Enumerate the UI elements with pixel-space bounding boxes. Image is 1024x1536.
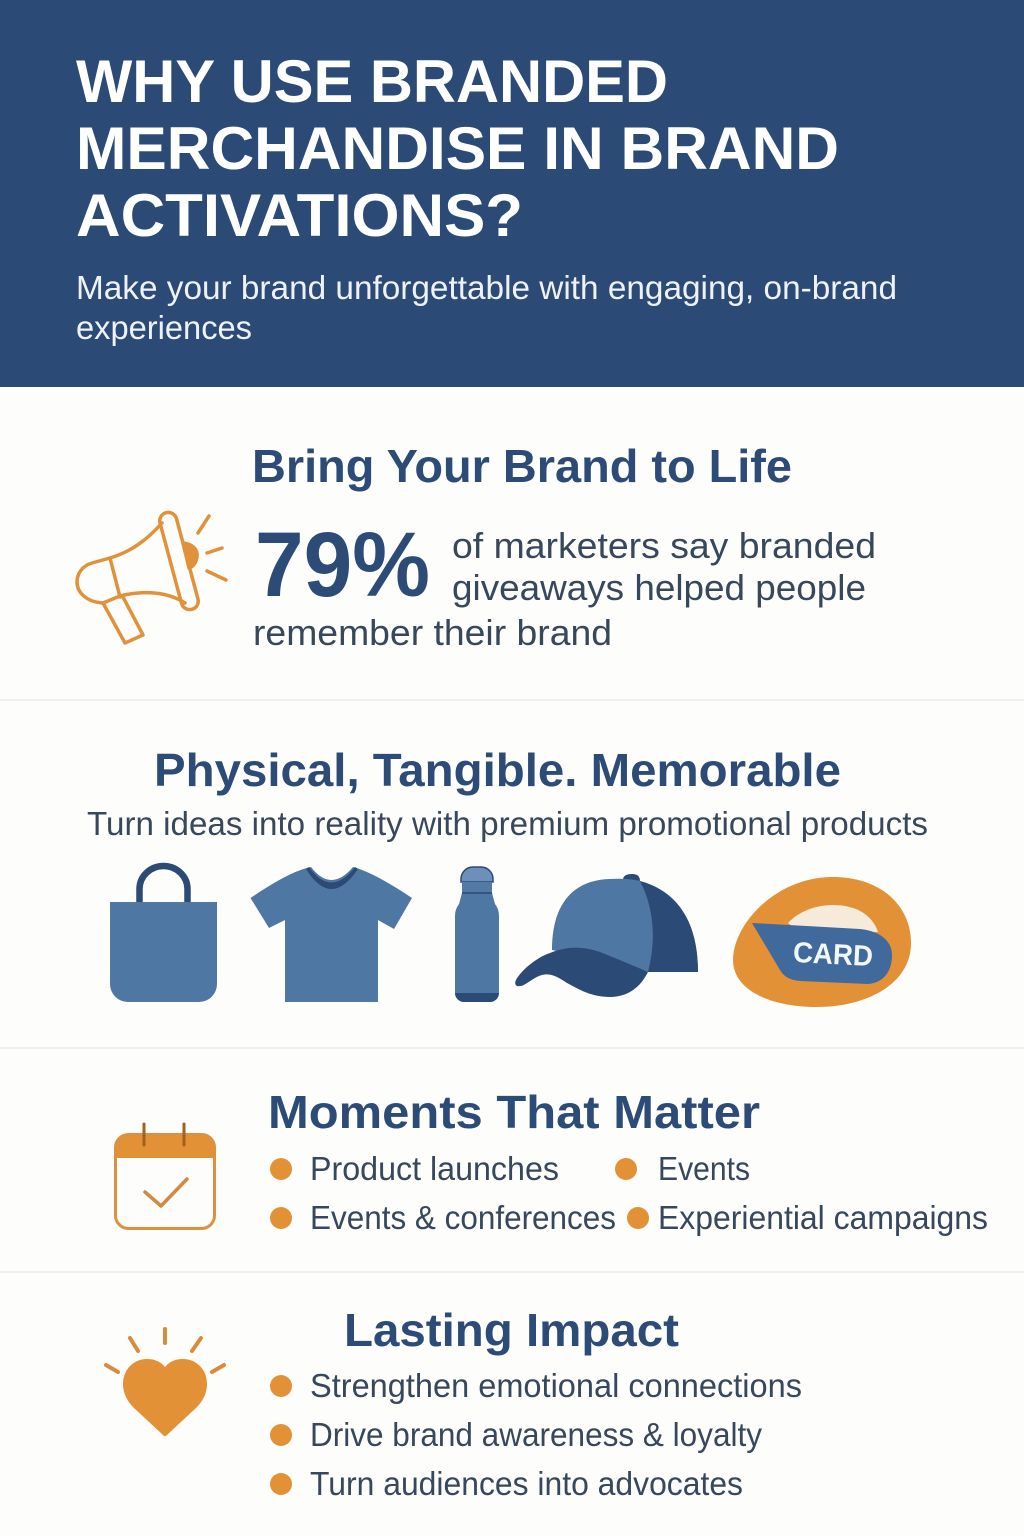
icon: tote bag (110, 866, 217, 1002)
heading: Physical, Tangible. Memorable (154, 744, 841, 796)
title: MERCHANDISE IN BRAND (76, 115, 839, 182)
icon: bottle (455, 867, 499, 1002)
panel: bring your brand to life (77, 440, 876, 653)
heading: Bring Your Brand to Life (252, 440, 792, 492)
header banner (0, 0, 1024, 387)
icon: t-shirt (250, 867, 412, 1002)
stat description (253, 525, 876, 653)
subtitle: experiences (76, 309, 252, 346)
bullet list: Product launches (310, 1150, 559, 1187)
icon: heart with rays (106, 1329, 224, 1436)
stat description: giveaways helped people (452, 567, 866, 608)
bullet list: Events & conferences (310, 1199, 616, 1236)
subtitle (76, 269, 897, 346)
bullet list: Events (658, 1150, 750, 1187)
title: WHY USE BRANDED (76, 48, 668, 115)
title (76, 48, 839, 249)
subheading: Turn ideas into reality with premium promotional products (87, 805, 928, 842)
bullet list: Strengthen emotional connections (310, 1367, 802, 1404)
panel: moments that matter (115, 1086, 988, 1236)
icon: megaphone (77, 511, 226, 643)
bullet list (270, 1367, 802, 1502)
statistic: 79% (255, 514, 430, 616)
panel: lasting impact (106, 1304, 802, 1502)
icon: card badge (733, 877, 911, 1007)
title: ACTIVATIONS? (76, 182, 523, 249)
bullet list: Drive brand awareness & loyalty (310, 1416, 762, 1453)
stat description: remember their brand (253, 612, 612, 653)
subtitle: Make your brand unforgettable with engaging, on-brand (76, 269, 897, 306)
card label: CARD (792, 937, 874, 973)
heading: Moments That Matter (268, 1086, 760, 1138)
icon: baseball cap (515, 874, 698, 997)
panel: physical, tangible, memorable (87, 744, 928, 1007)
bullet list: Experiential campaigns (658, 1199, 988, 1236)
bullet list (270, 1150, 988, 1236)
stat description: of marketers say branded (452, 525, 876, 566)
heading: Lasting Impact (344, 1304, 679, 1356)
bullet list: Turn audiences into advocates (310, 1465, 743, 1502)
icon: calendar (115, 1124, 215, 1228)
